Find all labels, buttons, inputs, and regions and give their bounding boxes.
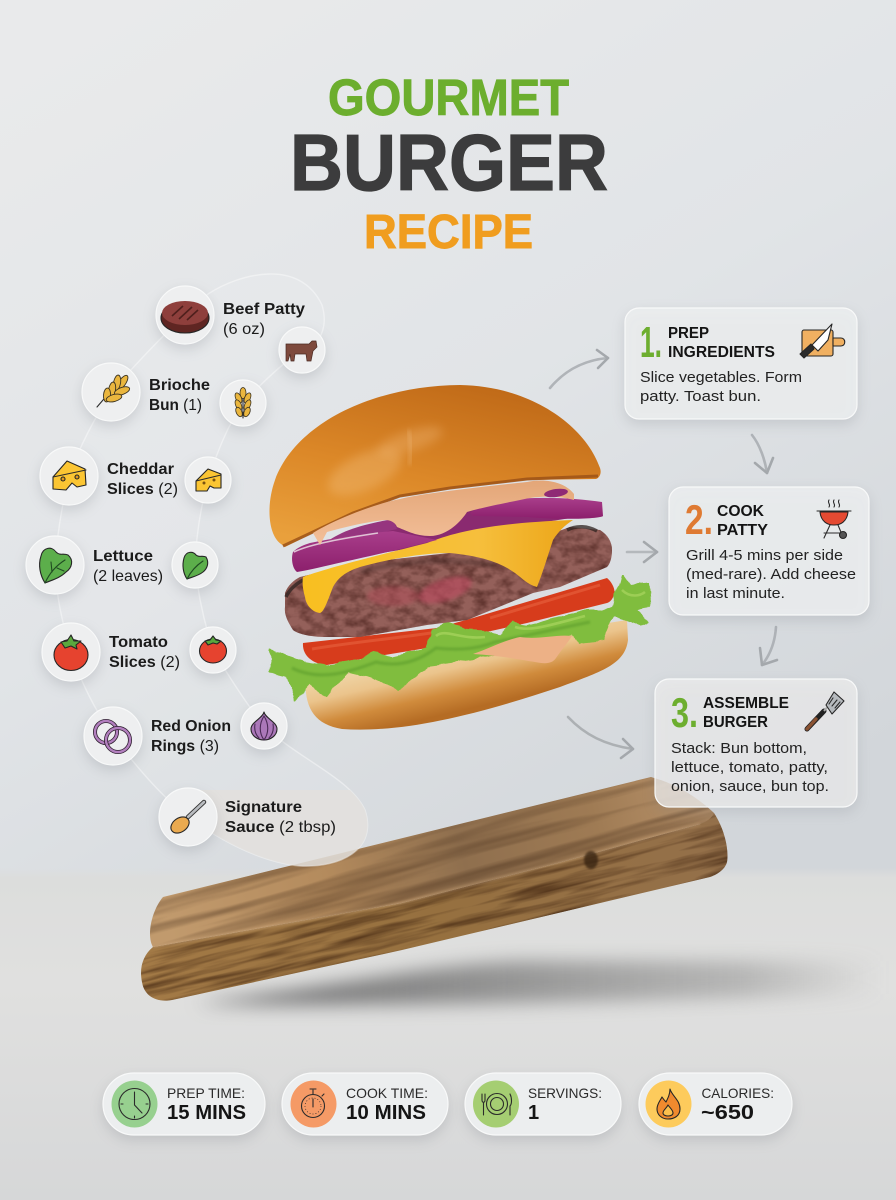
cheese — [303, 520, 573, 613]
ingredient: red onion rings — [84, 703, 287, 765]
arrow: step 1 to step 2 — [752, 435, 773, 473]
label: brioche bun — [149, 377, 210, 414]
tomato slice — [303, 578, 615, 665]
icon: spatula — [807, 692, 844, 729]
top bun — [269, 385, 601, 547]
stat: calories value — [701, 1085, 774, 1124]
icon: cow — [279, 327, 325, 373]
icon: grill — [817, 500, 851, 538]
label: signature sauce — [225, 799, 336, 836]
icon: spoon — [159, 788, 217, 846]
title: BURGER — [290, 118, 608, 207]
inner onion backing — [320, 505, 590, 560]
icon: wheat — [82, 363, 140, 421]
label: beef patty — [223, 301, 305, 338]
panel: step 2 cook patty — [669, 487, 869, 615]
text: step 2 description: in last minute. — [686, 585, 785, 602]
title — [290, 69, 608, 259]
number 2: 2. — [685, 496, 713, 543]
text: step 2 description: Grill 4-5 mins per side — [686, 547, 843, 564]
text: step 2 description — [686, 547, 856, 602]
icon: stopwatch — [290, 1080, 336, 1128]
board shadow — [195, 961, 880, 1005]
icon: clock — [112, 1080, 158, 1128]
text: step 3 description: onion, sauce, bun top. — [671, 778, 829, 795]
ingredient: signature sauce — [159, 788, 336, 846]
heading: assemble burger: ASSEMBLE — [703, 695, 789, 712]
stat pill: servings — [465, 1073, 621, 1135]
heading: cook patty: PATTY — [717, 522, 768, 539]
text: step 1 description: patty. Toast bun. — [640, 388, 761, 405]
bottom sauce — [473, 636, 572, 663]
icon: knife and board — [800, 324, 845, 358]
stat pill: calories — [639, 1073, 792, 1135]
right onion ring — [470, 498, 603, 519]
icon: onion rings — [84, 707, 142, 765]
stat: calories value: CALORIES: — [702, 1085, 774, 1101]
text: step 3 description — [671, 740, 829, 795]
heading: cook patty — [717, 503, 768, 539]
label: lettuce — [93, 548, 163, 585]
bottom bun — [305, 620, 628, 730]
number 3: 3. — [671, 689, 698, 736]
icon: tomato — [42, 623, 100, 681]
icon: beef patty — [156, 286, 214, 344]
back onion — [323, 519, 397, 545]
heading: prep ingredients: INGREDIENTS — [668, 344, 775, 361]
ingredient: cheddar slices — [40, 447, 231, 505]
heading: assemble burger — [703, 695, 789, 731]
top sauce — [313, 480, 574, 545]
title: GOURMET — [328, 69, 569, 126]
arrow: burger to step 2 — [627, 542, 657, 562]
stat pill: prep time — [103, 1073, 265, 1135]
heading: assemble burger: BURGER — [703, 714, 768, 731]
label: cheddar slices: Slices (2) — [107, 481, 178, 498]
stat: servings value: 1 — [528, 1102, 539, 1124]
stat: cook time value: COOK TIME: — [346, 1085, 428, 1101]
arrow: burger to step 3 — [568, 717, 633, 758]
heading: prep ingredients — [668, 325, 775, 361]
label: tomato slices — [109, 634, 180, 671]
patty — [285, 527, 612, 637]
stat: prep time value: 15 MINS — [167, 1102, 246, 1124]
label: lettuce: Lettuce — [93, 548, 153, 565]
icon: small lettuce — [172, 542, 218, 588]
stat: prep time value — [167, 1085, 246, 1124]
ingredient: tomato slices — [42, 623, 236, 681]
title: RECIPE — [364, 206, 533, 259]
text: step 3 description: lettuce, tomato, patty, — [671, 759, 828, 776]
stat: cook time value — [346, 1085, 428, 1124]
heading: cook patty: COOK — [717, 503, 764, 520]
heading: prep ingredients: PREP — [668, 325, 709, 342]
wooden cutting board — [141, 777, 728, 1001]
icon: small cheese — [185, 457, 231, 503]
icon: plate and cutlery — [473, 1080, 519, 1128]
stat pill: cook time — [282, 1073, 448, 1135]
panel: step 3 assemble burger — [655, 679, 857, 807]
text: step 1 description: Slice vegetables. Form — [640, 369, 802, 386]
ingredient: beef patty — [156, 286, 325, 373]
ingredient: brioche bun — [82, 363, 266, 426]
stat: prep time value: PREP TIME: — [167, 1085, 245, 1101]
label: beef patty: Beef Patty — [223, 301, 305, 318]
arrow: step 2 to step 3 — [760, 627, 777, 665]
lettuce — [270, 576, 650, 700]
number 1: 1. — [640, 318, 662, 367]
icon: small wheat — [220, 380, 266, 426]
text: step 1 description — [640, 369, 802, 405]
burger illustration — [269, 385, 650, 730]
ingredient: lettuce — [26, 536, 218, 594]
label: signature sauce: Signature — [225, 799, 302, 816]
label: beef patty: (6 oz) — [223, 321, 265, 338]
stat: cook time value: 10 MINS — [346, 1102, 426, 1124]
label: signature sauce: Sauce (2 tbsp) — [225, 819, 336, 836]
icon: small tomato — [190, 627, 236, 673]
label: cheddar slices — [107, 461, 178, 498]
text: step 3 description: Stack: Bun bottom, — [671, 740, 807, 757]
label: tomato slices: Tomato — [109, 634, 168, 651]
label: lettuce: (2 leaves) — [93, 568, 163, 585]
label: brioche bun: Bun (1) — [149, 397, 202, 414]
arrow: burger to step 1 — [550, 350, 608, 388]
stat: servings value — [528, 1085, 602, 1124]
text: step 2 description: (med-rare). Add cheese — [686, 566, 856, 583]
label: brioche bun: Brioche — [149, 377, 210, 394]
label: tomato slices: Slices (2) — [109, 654, 180, 671]
ingredient ribbon panel — [55, 274, 380, 880]
label: red onion rings: Red Onion — [151, 718, 231, 735]
icon: onion — [241, 703, 287, 749]
label: cheddar slices: Cheddar — [107, 461, 174, 478]
icon: flame — [646, 1080, 692, 1128]
icon: lettuce — [26, 536, 84, 594]
stat: servings value: SERVINGS: — [528, 1085, 602, 1101]
label: red onion rings — [151, 718, 231, 755]
front onion ring — [292, 531, 437, 572]
stat: calories value: ~650 — [701, 1102, 754, 1124]
icon: cheese — [40, 447, 98, 505]
label: red onion rings: Rings (3) — [151, 738, 219, 755]
panel: step 1 prep ingredients — [625, 308, 857, 419]
